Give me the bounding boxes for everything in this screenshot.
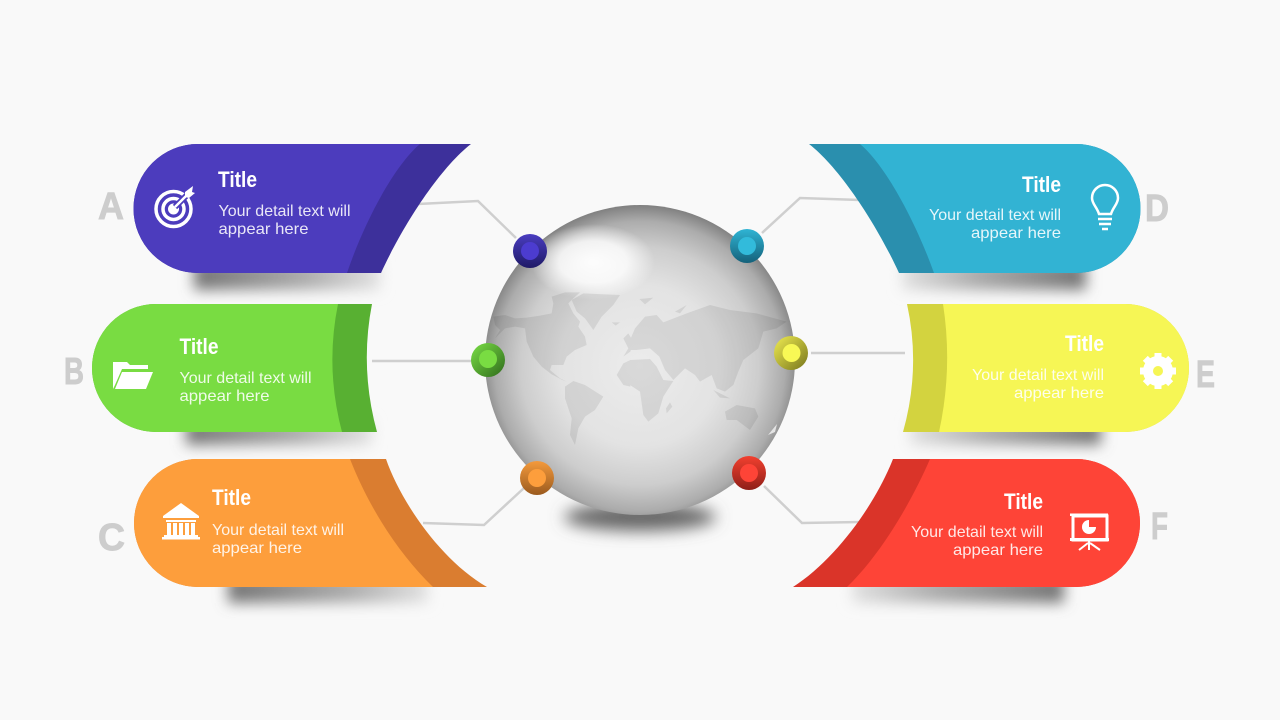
icon: folder <box>113 362 153 389</box>
detail F line 2: appear here <box>953 542 1043 559</box>
connector lines <box>372 198 905 525</box>
icon: presentation board <box>1070 514 1109 550</box>
title C: Title <box>212 485 251 510</box>
detail D line 2: appear here <box>971 225 1061 242</box>
panel F <box>793 459 1140 587</box>
card shadows <box>186 262 1101 603</box>
detail C line 2: appear here <box>212 540 302 557</box>
pin: red <box>732 456 766 490</box>
globe <box>485 205 795 515</box>
New Zealand <box>768 424 777 435</box>
letter F: F <box>1151 506 1168 548</box>
world map <box>493 292 787 445</box>
panel D <box>809 144 1140 273</box>
pin: yellow <box>774 336 808 370</box>
panel C <box>134 459 487 587</box>
pin: orange <box>520 461 554 495</box>
globe highlight <box>531 224 655 300</box>
letter A: A <box>98 186 124 228</box>
icon: light bulb <box>1092 185 1118 229</box>
pin: blue <box>513 234 547 268</box>
detail E: Your detail text will <box>972 367 1104 384</box>
letter C: C <box>98 517 125 559</box>
panel A <box>134 144 471 273</box>
detail F: Your detail text will <box>911 524 1043 541</box>
title F: Title <box>1004 489 1043 514</box>
title A: Title <box>218 167 257 192</box>
detail B: Your detail text will <box>180 370 312 387</box>
globe shadow <box>564 503 716 531</box>
pin: cyan <box>730 229 764 263</box>
title D: Title <box>1022 172 1061 197</box>
icon: bank <box>162 503 200 540</box>
detail D: Your detail text will <box>929 207 1061 224</box>
title B: Title <box>180 334 218 359</box>
detail E line 2: appear here <box>1014 385 1104 402</box>
letter E: E <box>1196 354 1215 396</box>
detail A line 2: appear here <box>218 221 309 238</box>
title E: Title <box>1065 331 1104 356</box>
icon: target <box>156 186 195 226</box>
letter D: D <box>1145 188 1169 230</box>
panel B <box>92 304 377 432</box>
pin: green <box>471 343 505 377</box>
panel E <box>903 304 1189 432</box>
detail A: Your detail text will <box>218 203 350 220</box>
detail B line 2: appear here <box>180 388 270 405</box>
detail C: Your detail text will <box>212 522 344 539</box>
icon: gear <box>1140 353 1176 389</box>
letter B: B <box>64 351 84 393</box>
